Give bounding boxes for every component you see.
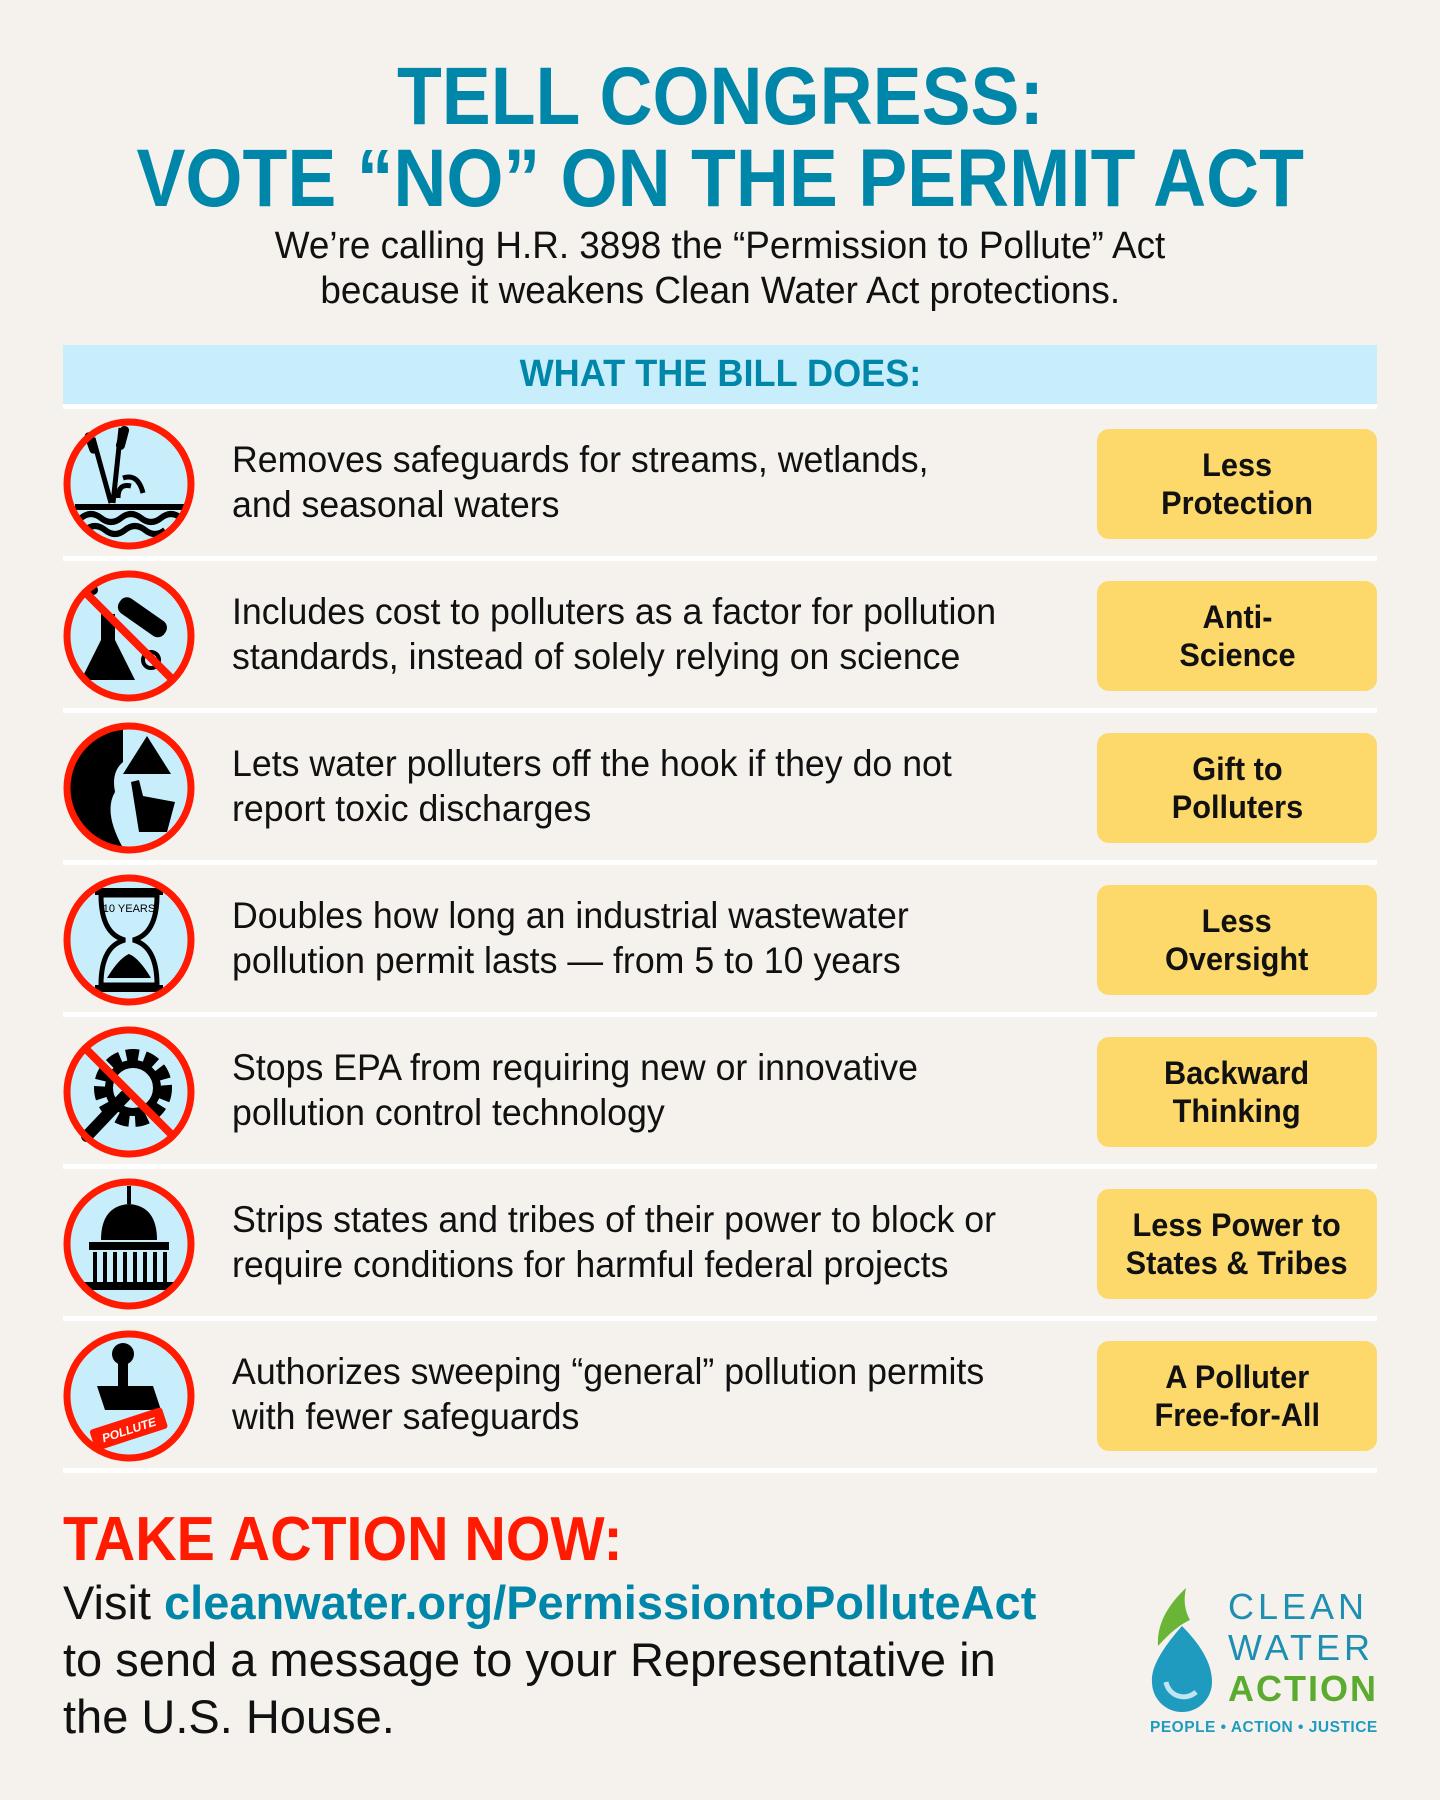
badge: Polluters [1171, 789, 1303, 825]
call to action text: the U.S. House. [63, 1690, 395, 1743]
call to action text: to send a message to your Representative in [63, 1633, 996, 1686]
text: Strips states and tribes of their power to block or [232, 1199, 996, 1240]
text: require conditions for harmful federal projects [232, 1244, 948, 1285]
text [232, 591, 996, 677]
badge [1097, 1341, 1377, 1451]
text: Doubles how long an industrial wastewater [232, 895, 909, 936]
logo wordmark: WATER [1228, 1627, 1374, 1668]
text: Lets water polluters off the hook if they do not [232, 743, 952, 784]
row 4 [64, 874, 1377, 1006]
logo tagline: PEOPLE • ACTION • JUSTICE [1150, 1719, 1378, 1736]
section header: what the bill does [63, 345, 1377, 404]
text [232, 439, 929, 525]
icon: wetlands [64, 418, 194, 550]
badge: Science [1179, 637, 1295, 673]
badge: States & Tribes [1126, 1245, 1348, 1281]
badge: Anti- [1202, 599, 1272, 635]
icon: silenced reporting [64, 722, 194, 854]
text [232, 743, 952, 829]
subtitle [274, 225, 1165, 312]
icon: hourglass [64, 874, 194, 1006]
text: Includes cost to polluters as a factor for pollution [232, 591, 996, 632]
title: VOTE “NO” ON THE PERMIT ACT [136, 133, 1304, 224]
icon: leaf and water drop [1152, 1588, 1212, 1712]
row 2 [64, 570, 1377, 702]
text: pollution control technology [232, 1092, 665, 1133]
subtitle: We’re calling H.R. 3898 the “Permission to Pollute” Act [275, 225, 1165, 267]
title [136, 51, 1304, 224]
text [232, 1199, 996, 1285]
badge: Oversight [1165, 941, 1309, 977]
text: Stops EPA from requiring new or innovative [232, 1047, 918, 1088]
badge: Less [1202, 447, 1272, 483]
badge [1097, 1189, 1377, 1299]
logo: clean water action [1150, 1586, 1378, 1736]
badge: Less Power to [1133, 1207, 1341, 1243]
badge: Thinking [1173, 1093, 1301, 1129]
icon: pollute stamp: POLLUTE [100, 1414, 159, 1445]
call to action text [63, 1576, 1036, 1743]
badge: Protection [1161, 485, 1313, 521]
badge [1097, 581, 1377, 691]
logo wordmark [1228, 1586, 1378, 1709]
badge [1097, 429, 1377, 539]
text: Removes safeguards for streams, wetlands, [232, 439, 929, 480]
text [232, 1047, 918, 1133]
logo wordmark: CLEAN [1228, 1586, 1368, 1627]
badge [1097, 1037, 1377, 1147]
badge: Free-for-All [1154, 1397, 1320, 1433]
section header: what the bill does: WHAT THE BILL DOES: [519, 353, 921, 395]
icon: pollute stamp [64, 1330, 194, 1462]
text: Authorizes sweeping “general” pollution permits [232, 1351, 984, 1392]
subtitle: because it weakens Clean Water Act protections. [320, 270, 1120, 312]
row 1 [64, 418, 1377, 550]
icon: hourglass: 10 YEARS [103, 903, 155, 915]
text: report toxic discharges [232, 788, 591, 829]
text: with fewer safeguards [232, 1396, 579, 1437]
badge: Gift to [1192, 751, 1282, 787]
badge [1097, 885, 1377, 995]
badge: Less [1202, 903, 1272, 939]
row 7 [64, 1330, 1377, 1462]
icon: capitol [64, 1178, 194, 1310]
logo wordmark: ACTION [1228, 1668, 1378, 1709]
row 3 [64, 722, 1377, 854]
row 6 [64, 1178, 1377, 1310]
text: and seasonal waters [232, 484, 560, 525]
title: TELL CONGRESS: [397, 51, 1043, 142]
text: pollution permit lasts — from 5 to 10 years [232, 940, 901, 981]
text [232, 1351, 984, 1437]
take action heading: TAKE ACTION NOW: [63, 1505, 623, 1574]
badge [1097, 733, 1377, 843]
text: standards, instead of solely relying on science [232, 636, 960, 677]
badge: Backward [1164, 1055, 1310, 1091]
icon: gear and wrench [64, 1026, 194, 1158]
icon: science [64, 570, 194, 702]
text [232, 895, 909, 981]
call to action text: Visit cleanwater.org/PermissiontoPolluteAct [63, 1576, 1036, 1629]
badge: A Polluter [1165, 1359, 1309, 1395]
row 5 [64, 1026, 1377, 1158]
